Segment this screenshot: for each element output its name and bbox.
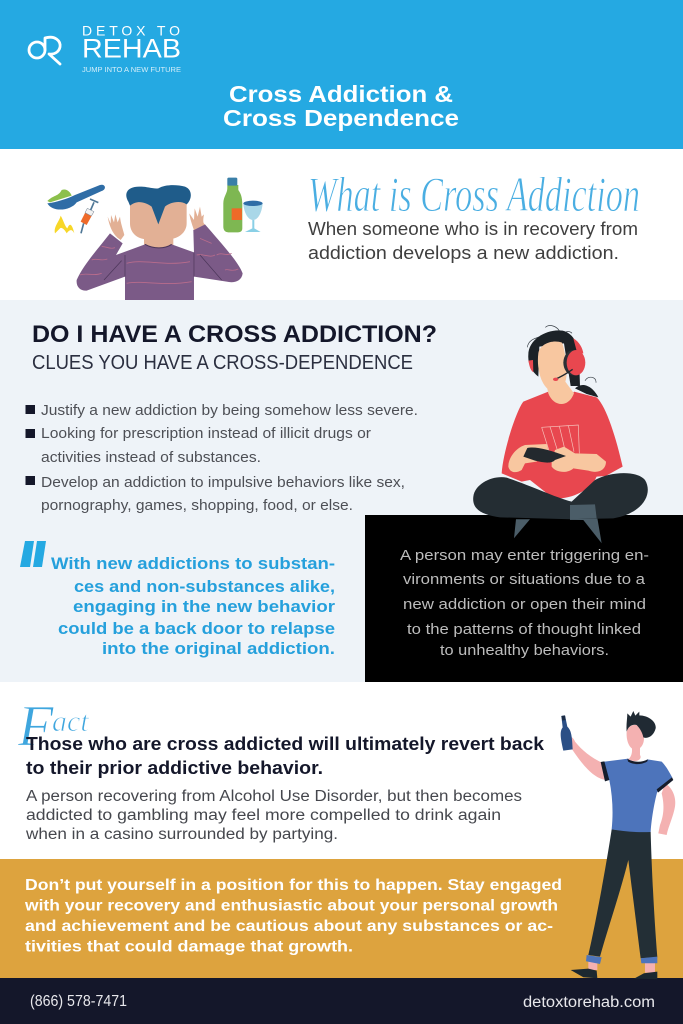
icon: flame <box>55 216 74 233</box>
hair <box>126 185 191 224</box>
icon: quote mark <box>20 541 46 567</box>
raised arm <box>567 736 607 780</box>
logo wordmark <box>82 22 181 74</box>
illustration: man raising a bottle <box>561 711 675 979</box>
ponytail <box>575 385 598 397</box>
fact body text: A person recovering from Alcohol Use Disorder, but then becomes <box>26 788 522 805</box>
pull quote: could be a back door to relapse <box>58 619 335 638</box>
black callout text: to unhealthy behaviors. <box>440 642 609 659</box>
advice text <box>24 877 562 956</box>
lowered arm <box>658 783 675 835</box>
footer: website: detoxtorehab.com <box>523 994 655 1011</box>
sweater <box>502 392 623 499</box>
title: Cross Dependence <box>223 105 459 131</box>
panel: gold advice background <box>0 859 683 978</box>
hair <box>528 330 580 386</box>
advice text: Don’t put yourself in a position for this to happen. Stay engaged <box>25 877 562 894</box>
black callout text: new addiction or open their mind <box>403 596 646 613</box>
panel: clues background <box>0 300 683 682</box>
footer: phone number: (866) 578-7471 <box>30 993 127 1010</box>
definition text: When someone who is in recovery from <box>308 218 638 239</box>
shirt print <box>542 425 579 453</box>
heading: do I have a cross addiction: DO I HAVE A CROSS ADDICTION? <box>32 321 437 348</box>
panel: what is cross addiction background <box>0 149 683 300</box>
list of clues <box>26 402 418 514</box>
icon: beer bottle <box>561 715 573 751</box>
neck <box>144 232 173 250</box>
bullet 2 <box>26 425 371 466</box>
icon: wine bottle <box>223 178 242 232</box>
illustration: person surrounded by substances <box>47 178 263 300</box>
black callout text: A person may enter triggering en- <box>400 547 649 564</box>
black callout text: to the patterns of thought linked <box>407 621 641 638</box>
bullet 3: pornography, games, shopping, food, or else. <box>41 497 353 514</box>
cuffs <box>586 955 657 964</box>
ankles <box>588 962 655 973</box>
panel: fact background <box>0 682 683 859</box>
legs <box>473 473 648 519</box>
fact headline <box>26 734 545 778</box>
black callout text <box>400 547 649 659</box>
fact body text <box>25 788 522 843</box>
black callout text: vironments or situations due to a <box>403 571 646 588</box>
panel: header background <box>0 0 683 149</box>
hair <box>626 711 656 738</box>
face <box>130 202 187 239</box>
sweater <box>77 224 243 300</box>
script label: Fact: F <box>17 693 54 758</box>
title <box>223 81 459 131</box>
pull quote: ces and non-substances alike, <box>74 577 335 596</box>
advice text: tivities that could damage that growth. <box>25 938 353 956</box>
icon: spoon with powder <box>47 185 105 210</box>
icon: dR monogram <box>29 37 60 64</box>
panel: black callout background <box>365 515 683 682</box>
illustration: gamer with headset and controller <box>473 326 648 543</box>
bullet 2: activities instead of substances. <box>41 449 261 466</box>
t-shirt <box>602 759 673 832</box>
title: Cross Addiction & <box>229 81 453 107</box>
pull quote <box>51 554 335 658</box>
logo wordmark: JUMP INTO A NEW FUTURE <box>82 67 181 74</box>
logo wordmark: REHAB <box>82 34 181 64</box>
bullet 3: Develop an addiction to impulsive behaviors like sex, <box>41 474 405 491</box>
bullet 3 <box>26 474 405 514</box>
definition text <box>308 218 638 263</box>
panel: footer background <box>0 978 683 1024</box>
trousers <box>588 829 657 958</box>
pull quote: With new addictions to substan- <box>51 554 335 573</box>
advice text: and achievement and be cautious about any substances or ac- <box>25 918 553 935</box>
hands <box>108 214 124 240</box>
pull quote: into the original addiction. <box>102 639 335 658</box>
icon: syringe <box>81 199 98 233</box>
shoes <box>571 969 657 979</box>
face and neck <box>538 342 574 404</box>
bullet 1: Justify a new addiction by being somehow less severe. <box>41 402 418 419</box>
advice text: with your recovery and enthusiastic about your personal growth <box>24 898 558 914</box>
subheading: clues: CLUES YOU HAVE A CROSS-DEPENDENCE <box>32 352 413 374</box>
game controller <box>523 447 566 463</box>
icon: wine glass <box>243 201 263 232</box>
bullet 2: Looking for prescription instead of illicit drugs or <box>41 425 371 442</box>
hands <box>508 444 606 472</box>
fact body text: when in a casino surrounded by partying. <box>25 826 338 843</box>
feet <box>514 504 602 543</box>
script label: Fact: act <box>52 705 89 738</box>
pull quote: engaging in the new behavior <box>73 597 335 616</box>
logo wordmark: DETOX TO <box>82 22 180 38</box>
definition text: addiction develops a new addiction. <box>308 242 619 263</box>
fact headline: to their prior addictive behavior. <box>26 758 323 778</box>
headset <box>528 338 585 381</box>
logo <box>29 22 181 74</box>
fact body text: addicted to gambling may feel more compelled to drink again <box>26 807 501 824</box>
neck and head <box>628 743 641 761</box>
fact headline: Those who are cross addicted will ultimately revert back <box>26 734 545 754</box>
